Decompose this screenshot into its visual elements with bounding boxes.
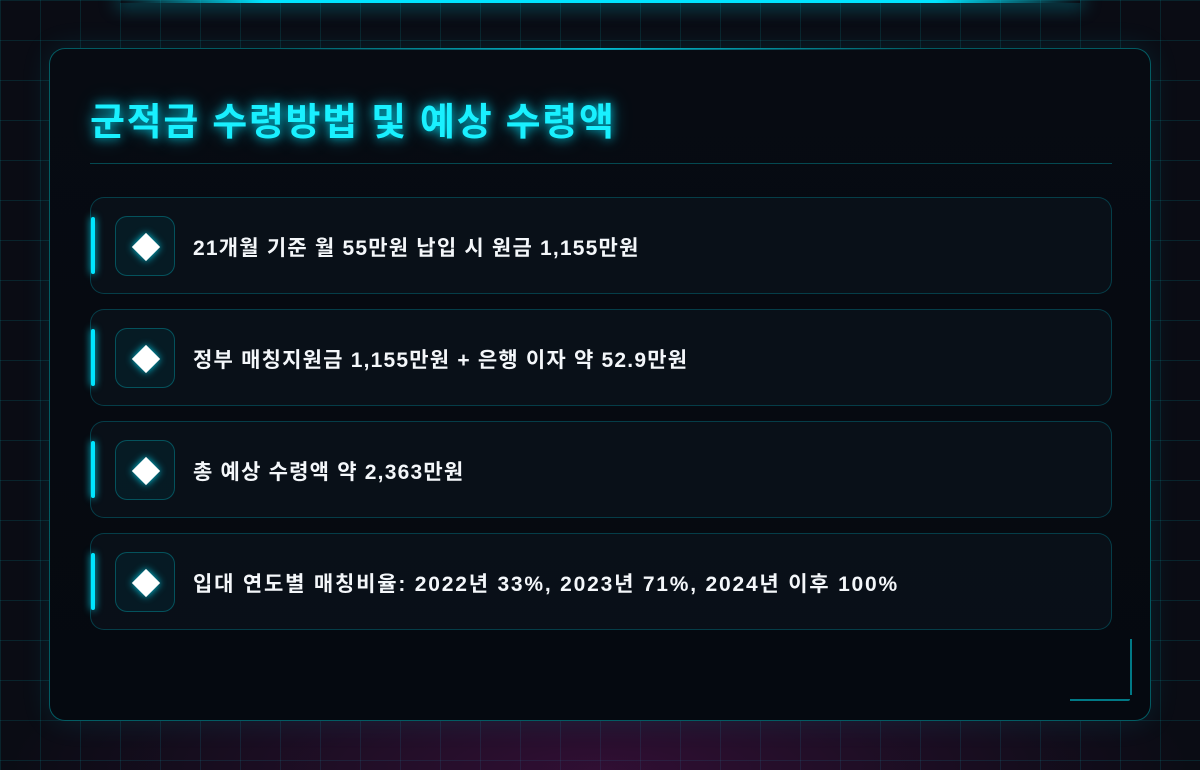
icon: diamond xyxy=(115,328,175,388)
item 4 xyxy=(90,533,1112,630)
top glow bar xyxy=(120,0,1080,3)
text 3: 총 예상 수령액 약 2,363만원 xyxy=(193,461,464,484)
icon: diamond xyxy=(115,440,175,500)
text 1: 21개월 기준 월 55만원 납입 시 원금 1,155만원 xyxy=(193,237,640,260)
icon: diamond xyxy=(115,552,175,612)
item 3 xyxy=(90,421,1112,518)
text 2: 정부 매칭지원금 1,155만원 + 은행 이자 약 52.9만원 xyxy=(193,349,688,372)
item 2 xyxy=(90,309,1112,406)
corner bracket xyxy=(1130,639,1132,695)
title: 군적금 수령방법 및 예상 수령액 xyxy=(90,102,616,144)
text 4: 입대 연도별 매칭비율: 2022년 33%, 2023년 71%, 2024년 이후 100% xyxy=(193,573,899,596)
icon: diamond xyxy=(115,216,175,276)
item 1 xyxy=(90,197,1112,294)
